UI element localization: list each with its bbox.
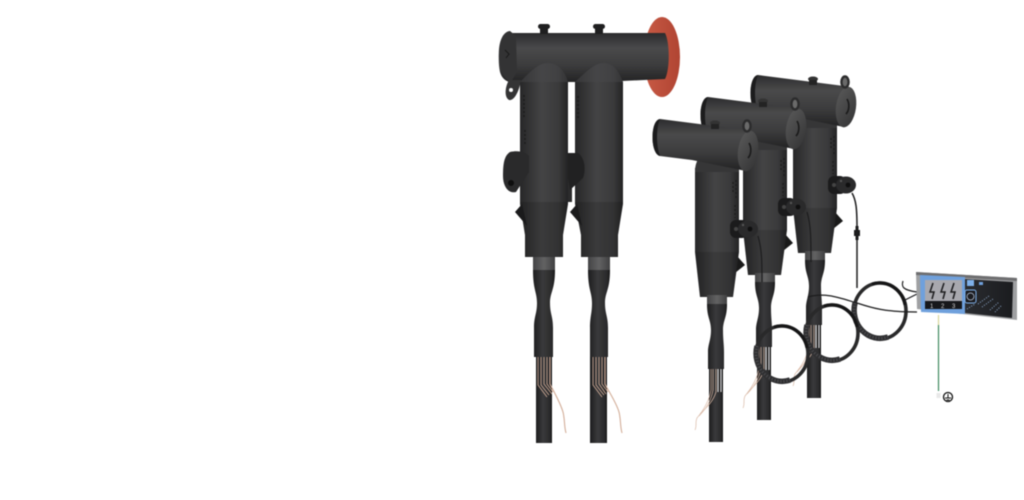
connector: middle phase <box>700 97 809 420</box>
phase number strip <box>925 301 962 309</box>
indicator dots <box>967 296 1002 312</box>
sensor coil: rear <box>854 283 906 339</box>
lcd screen <box>925 280 962 302</box>
monitoring panel: 2 <box>941 304 945 310</box>
sensor coil: front <box>756 326 808 382</box>
second body <box>575 63 623 257</box>
gap between bodies <box>568 82 574 153</box>
fins <box>515 204 527 226</box>
monitoring panel: 1 <box>930 304 934 310</box>
inline connector <box>854 226 860 240</box>
side knobs <box>568 153 585 190</box>
mounting lug <box>506 80 521 100</box>
first body <box>520 63 568 257</box>
connector pair: left assembly <box>499 17 680 443</box>
blue display frame <box>920 275 965 314</box>
horizontal bus cylinder <box>499 33 669 83</box>
earth symbol <box>944 392 952 402</box>
panel casing <box>916 272 1017 320</box>
earth wire <box>936 315 940 398</box>
connector: front phase <box>652 119 761 442</box>
label marks <box>524 95 578 146</box>
red flange <box>644 17 680 97</box>
monitoring panel: 3 <box>952 304 956 310</box>
signal cables <box>758 193 917 312</box>
monitoring panel <box>916 272 1017 320</box>
lightning indicators <box>930 283 955 299</box>
sensor coil: middle <box>806 305 858 361</box>
rear body <box>520 75 572 202</box>
dial button <box>965 290 976 303</box>
connector: back phase <box>750 75 859 398</box>
cable right <box>588 257 622 443</box>
small status button <box>967 280 974 286</box>
cable left <box>533 257 566 443</box>
nipples on bus <box>538 24 605 34</box>
